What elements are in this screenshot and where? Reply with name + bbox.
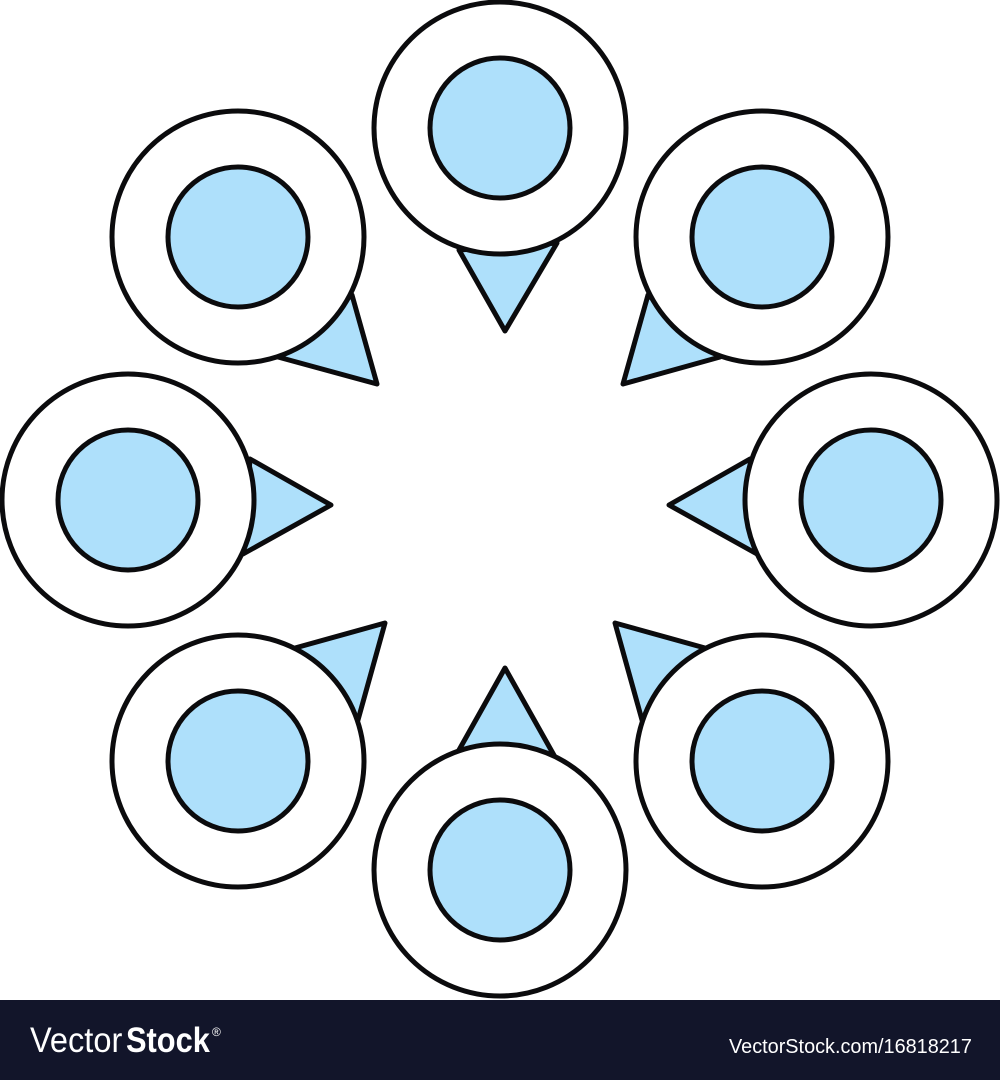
pin: top [374,2,626,331]
pin: left [2,374,331,626]
pin: bottom [374,668,626,996]
logo: Vector [30,1021,122,1060]
logo [30,1021,221,1060]
pin: top left [112,111,377,384]
pin: top right [623,111,888,384]
pin: bottom left [112,623,385,887]
logo: Stock [126,1021,210,1060]
image url: VectorStock.com/16818217 [729,1036,972,1058]
pin: right [669,374,997,626]
pin: bottom right [615,623,888,887]
logo: ® [212,1025,221,1039]
footer bar [0,1000,1000,1080]
